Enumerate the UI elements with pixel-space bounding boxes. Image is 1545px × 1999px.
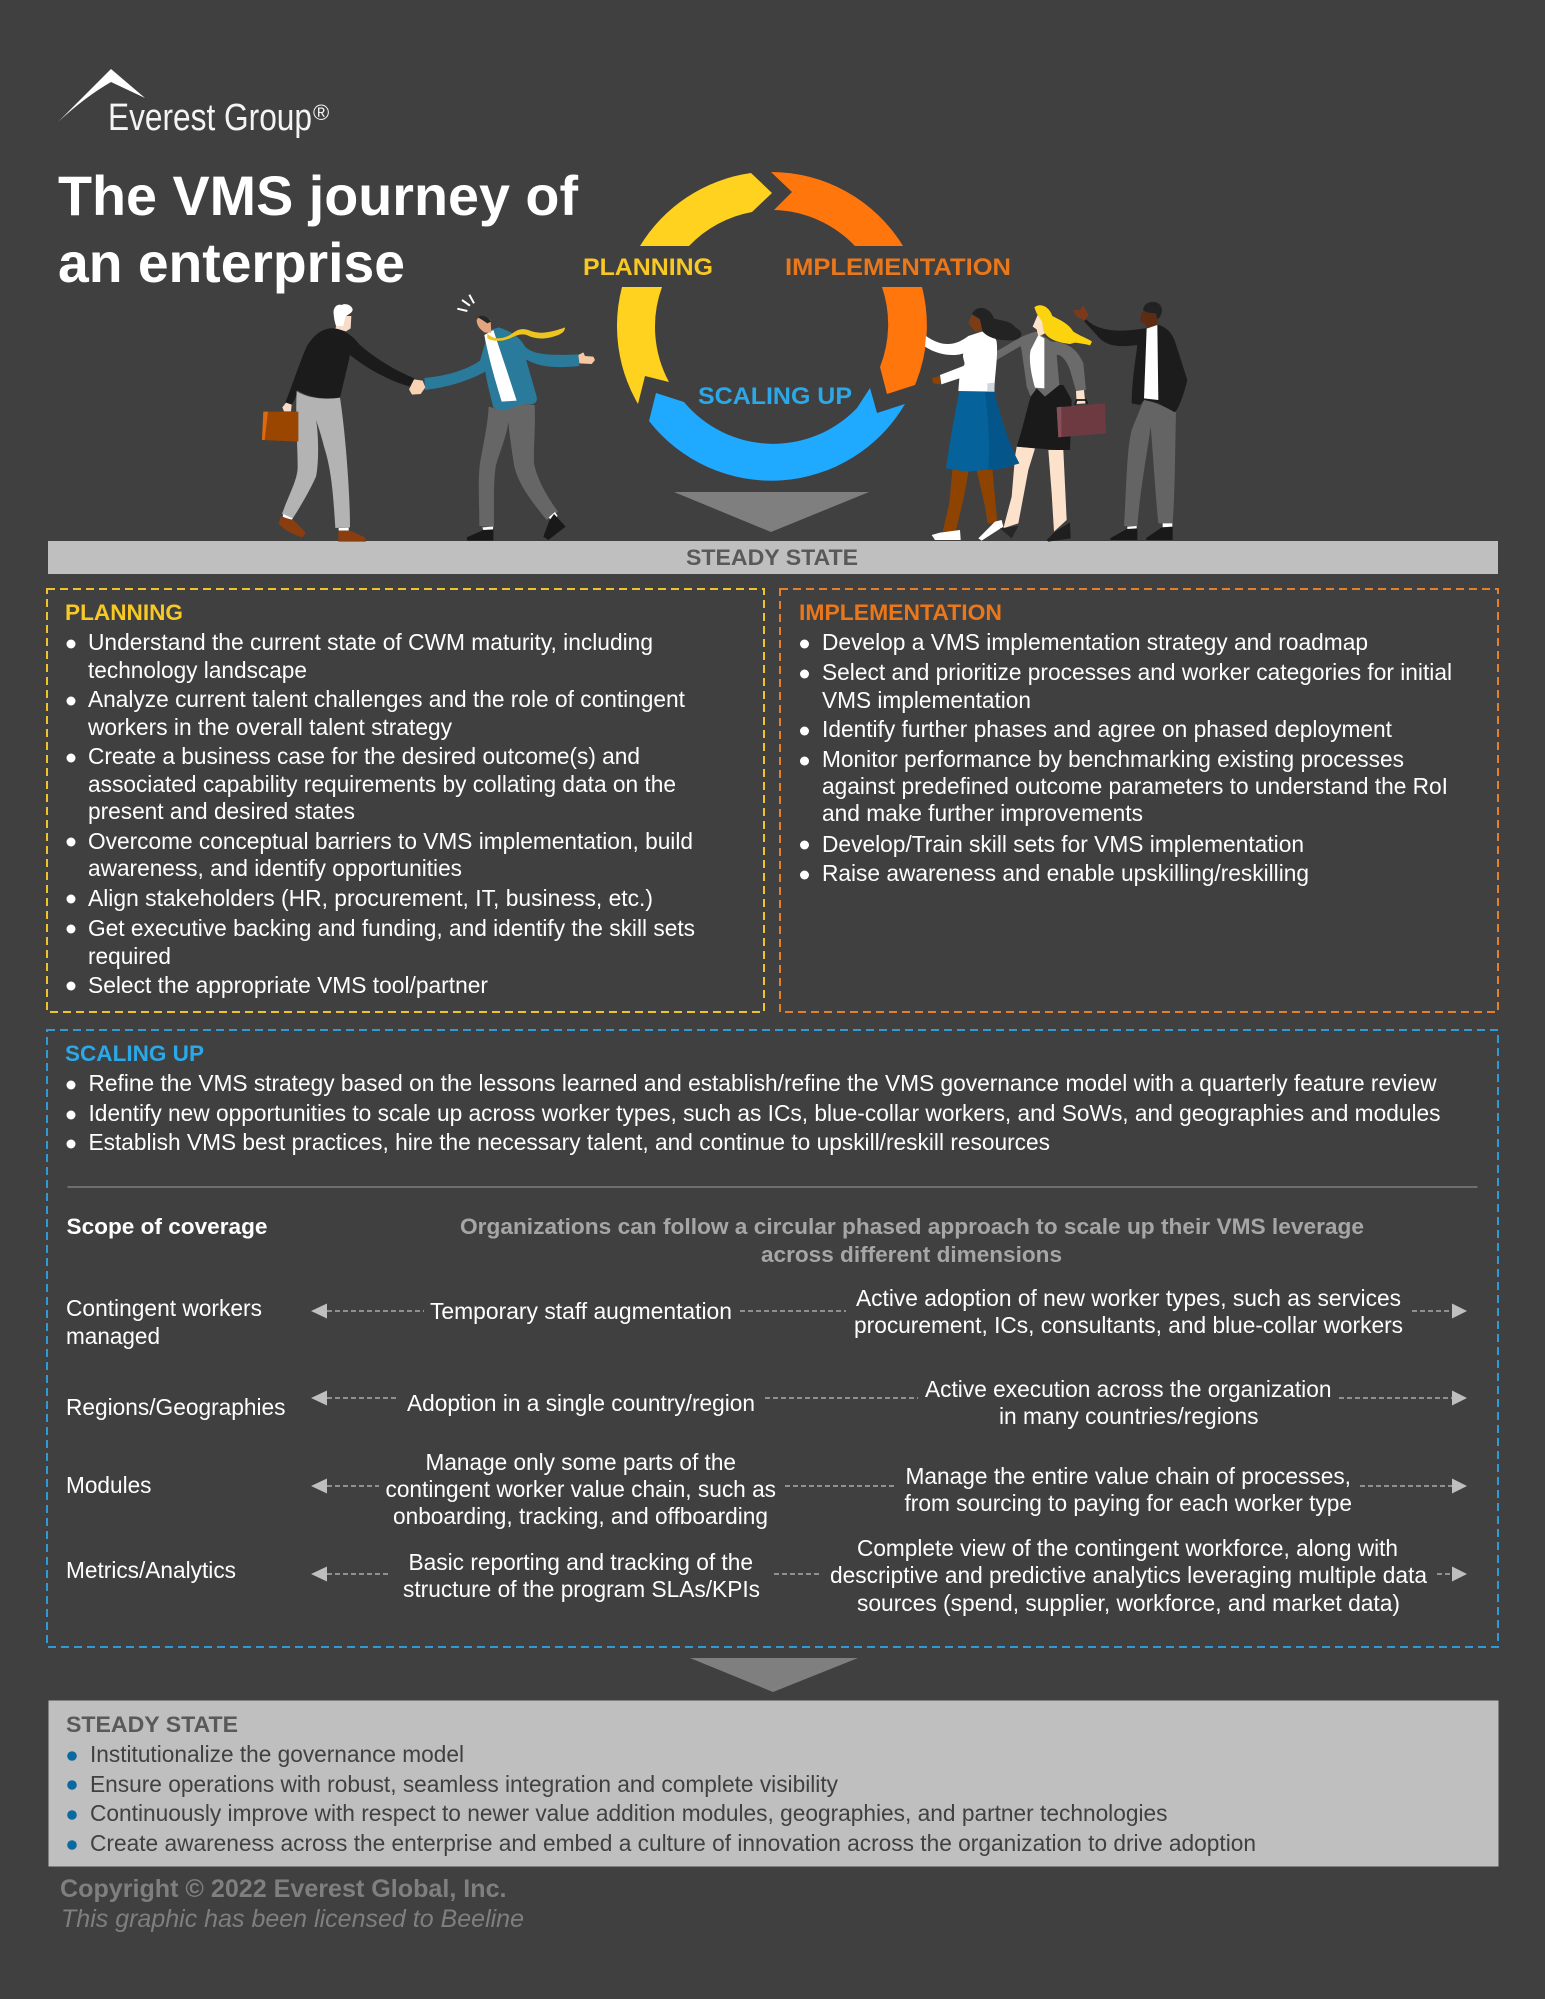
scope intro heading bbox=[460, 1214, 1364, 1267]
copyright: This graphic has been licensed to Beeline bbox=[61, 1905, 524, 1933]
title bbox=[58, 164, 578, 294]
panel: planning bbox=[47, 589, 764, 1012]
logo: Everest Group bbox=[58, 69, 329, 139]
panel: scaling up: Identify new opportunities to scale up across worker types, such as ICs, blue-collar workers, and SoWs, and geographies and modules bbox=[88, 1100, 1440, 1126]
copyright: Copyright © 2022 Everest Global, Inc. bbox=[60, 1875, 506, 1903]
row: metrics/analytics bbox=[66, 1535, 1467, 1616]
copyright bbox=[60, 1875, 524, 1933]
panel: implementation: Develop a VMS implementation strategy and roadmap bbox=[822, 629, 1368, 655]
panel: planning: Analyze current talent challenges and the role of contingent bbox=[88, 686, 686, 712]
panel: planning: awareness, and identify opportunities bbox=[88, 855, 462, 881]
panel: implementation: and make further improvements bbox=[822, 800, 1143, 826]
circular cycle diagram bbox=[583, 172, 1011, 481]
row: metrics/analytics: descriptive and predictive analytics leveraging multiple data bbox=[830, 1562, 1427, 1588]
title: The VMS journey of bbox=[58, 164, 578, 227]
row: regions/geographies: in many countries/regions bbox=[999, 1403, 1258, 1429]
circular cycle diagram: IMPLEMENTATION bbox=[785, 254, 1011, 281]
row: metrics/analytics: Metrics/Analytics bbox=[66, 1557, 236, 1583]
steady state bar bbox=[48, 541, 1498, 574]
panel: implementation: IMPLEMENTATION bbox=[799, 600, 1002, 625]
row: regions/geographies: Adoption in a single country/region bbox=[407, 1390, 755, 1416]
panel: scaling up: SCALING UP bbox=[65, 1041, 204, 1066]
panel: planning: Create a business case for the desired outcome(s) and bbox=[88, 743, 640, 769]
illustration: two men shaking hands bbox=[262, 295, 595, 542]
title: an enterprise bbox=[58, 231, 405, 294]
row: regions/geographies: Active execution across the organization bbox=[925, 1376, 1332, 1402]
row: contingent workers managed: Temporary staff augmentation bbox=[430, 1298, 732, 1324]
panel: implementation bbox=[780, 589, 1498, 1012]
panel: planning: Align stakeholders (HR, procurement, IT, business, etc.) bbox=[88, 885, 653, 911]
logo: Everest Group: ® bbox=[313, 100, 329, 125]
row: contingent workers managed bbox=[66, 1285, 1467, 1349]
panel: planning: technology landscape bbox=[88, 657, 307, 683]
row: modules: Manage the entire value chain of processes, bbox=[906, 1463, 1351, 1489]
panel: implementation: against predefined outcome parameters to understand the RoI bbox=[822, 773, 1448, 799]
panel: planning: Overcome conceptual barriers to VMS implementation, build bbox=[88, 828, 693, 854]
row: contingent workers managed: Active adoption of new worker types, such as services bbox=[856, 1285, 1401, 1311]
circular cycle diagram: PLANNING bbox=[583, 254, 713, 281]
scope intro heading: across different dimensions bbox=[761, 1242, 1062, 1267]
scope of coverage heading: Scope of coverage bbox=[66, 1214, 268, 1239]
panel: scaling up: Establish VMS best practices, hire the necessary talent, and continue to upskill/reskill resources bbox=[88, 1129, 1050, 1155]
panel: implementation: VMS implementation bbox=[822, 687, 1031, 713]
row: modules: onboarding, tracking, and offboarding bbox=[393, 1503, 768, 1529]
panel: steady state: Ensure operations with robust, seamless integration and complete visibility bbox=[90, 1771, 839, 1797]
row: metrics/analytics: Complete view of the contingent workforce, along with bbox=[857, 1535, 1398, 1561]
row: regions/geographies bbox=[66, 1376, 1467, 1429]
panel: planning: Select the appropriate VMS tool/partner bbox=[88, 972, 488, 998]
panel: planning: present and desired states bbox=[88, 798, 355, 824]
steady state bar: STEADY STATE bbox=[686, 545, 858, 570]
row: contingent workers managed: Contingent workers bbox=[66, 1295, 262, 1321]
row: modules: from sourcing to paying for each worker type bbox=[904, 1490, 1352, 1516]
row: modules: Modules bbox=[66, 1472, 152, 1498]
arrow: scaling up to steady state bbox=[690, 1658, 858, 1692]
panel: scaling up bbox=[47, 1030, 1498, 1647]
panel: steady state: Continuously improve with respect to newer value addition modules, geographies, and partner technologies bbox=[90, 1800, 1168, 1826]
panel: scaling up: Refine the VMS strategy based on the lessons learned and establish/refine the VMS governance model with a quarterly feature review bbox=[88, 1070, 1437, 1096]
panel: planning: required bbox=[88, 943, 171, 969]
panel: planning: Understand the current state of CWM maturity, including bbox=[88, 629, 653, 655]
panel: implementation: Select and prioritize processes and worker categories for initial bbox=[822, 659, 1452, 685]
row: modules bbox=[66, 1449, 1467, 1529]
panel: implementation: Identify further phases and agree on phased deployment bbox=[822, 716, 1393, 742]
panel: implementation: Monitor performance by benchmarking existing processes bbox=[822, 746, 1404, 772]
panel: implementation: Develop/Train skill sets for VMS implementation bbox=[822, 831, 1304, 857]
row: modules: Manage only some parts of the bbox=[426, 1449, 736, 1475]
panel: steady state: STEADY STATE bbox=[66, 1712, 238, 1737]
illustration: three colleagues bbox=[925, 302, 1187, 542]
row: metrics/analytics: structure of the program SLAs/KPIs bbox=[403, 1576, 760, 1602]
panel: planning: associated capability requirements by collating data on the bbox=[88, 771, 676, 797]
panel: planning: Get executive backing and funding, and identify the skill sets bbox=[88, 915, 695, 941]
row: regions/geographies: Regions/Geographies bbox=[66, 1394, 286, 1420]
panel: implementation: Raise awareness and enable upskilling/reskilling bbox=[822, 860, 1309, 886]
row: metrics/analytics: sources (spend, supplier, workforce, and market data) bbox=[857, 1590, 1400, 1616]
panel: planning: workers in the overall talent strategy bbox=[87, 714, 453, 740]
logo: Everest Group: Everest Group bbox=[108, 97, 312, 139]
scope intro heading: Organizations can follow a circular phased approach to scale up their VMS leverage bbox=[460, 1214, 1364, 1239]
panel: planning: PLANNING bbox=[65, 600, 183, 625]
panel: steady state bbox=[48, 1700, 1498, 1866]
row: modules: contingent worker value chain, such as bbox=[386, 1476, 776, 1502]
panel: steady state: Create awareness across the enterprise and embed a culture of innovation across the organization to drive adoption bbox=[90, 1830, 1256, 1856]
panel: steady state: Institutionalize the governance model bbox=[90, 1741, 464, 1767]
row: contingent workers managed: managed bbox=[66, 1323, 160, 1349]
arrow: cycle to steady state bbox=[674, 492, 869, 532]
circular cycle diagram: SCALING UP bbox=[698, 383, 852, 410]
row: metrics/analytics: Basic reporting and tracking of the bbox=[408, 1549, 753, 1575]
row: contingent workers managed: procurement, ICs, consultants, and blue-collar workers bbox=[854, 1312, 1403, 1338]
